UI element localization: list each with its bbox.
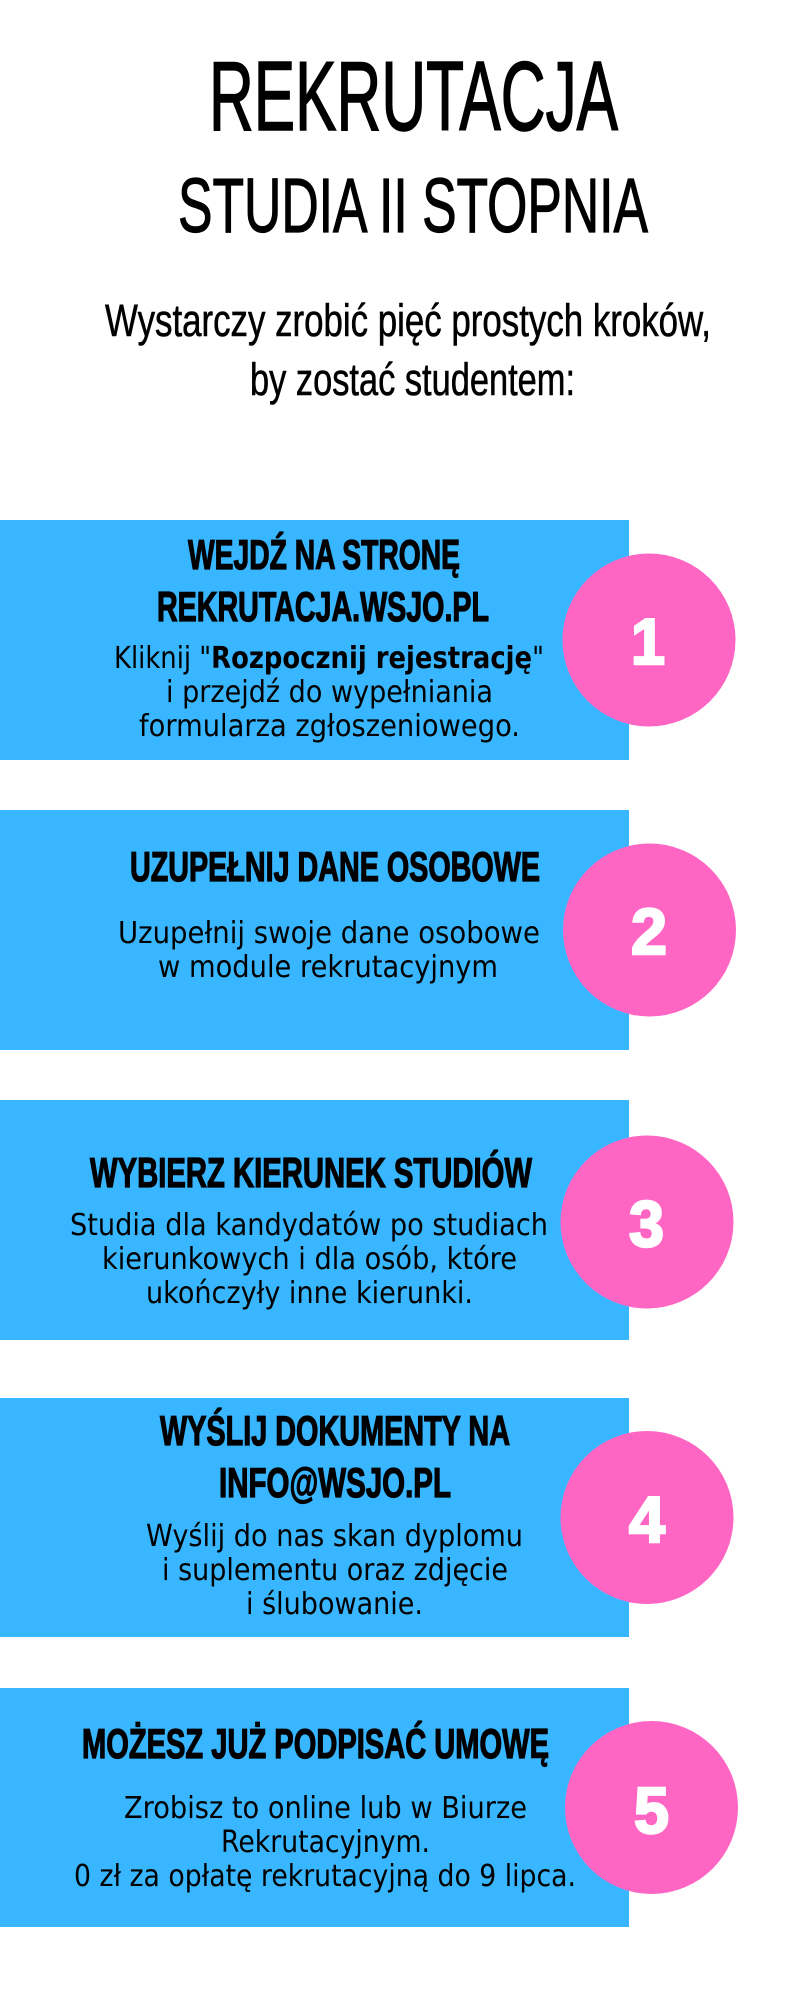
step 1 heading: REKRUTACJA.WSJO.PL xyxy=(157,583,489,630)
step 4 heading: WYŚLIJ DOKUMENTY NA xyxy=(160,1406,510,1454)
step 2 number badge: 2 xyxy=(631,895,667,968)
panel: step 2 xyxy=(0,810,736,1050)
step 1 text: Kliknij "Rozpocznij rejestrację" xyxy=(114,641,544,676)
step 5 text: Zrobisz to online lub w Biurze xyxy=(124,1791,527,1826)
step 5 number badge: 5 xyxy=(634,1774,669,1847)
step 4 text xyxy=(146,1519,523,1622)
step 5 heading: MOŻESZ JUŻ PODPISAĆ UMOWĘ xyxy=(82,1719,549,1767)
step 3 text: kierunkowych i dla osób, które xyxy=(102,1242,517,1277)
step 4 heading: INFO@WSJO.PL xyxy=(219,1459,451,1506)
step 1 heading: WEJDŹ NA STRONĘ xyxy=(188,531,460,578)
step 1 text: i przejdź do wypełniania xyxy=(166,675,493,710)
step 5 number badge xyxy=(565,1721,738,1894)
step 2 heading: UZUPEŁNIJ DANE OSOBOWE xyxy=(130,843,540,890)
step 4 text: i ślubowanie. xyxy=(246,1587,423,1622)
step 2 text xyxy=(118,916,540,985)
panel: step 3 xyxy=(0,1100,734,1340)
panel: step 5 xyxy=(0,1688,738,1927)
panel: step 4 xyxy=(0,1398,734,1637)
intro text: by zostać studentem: xyxy=(250,354,575,405)
step 4 number badge: 4 xyxy=(629,1483,665,1556)
step 2 number badge xyxy=(563,844,736,1016)
step 3 heading: WYBIERZ KIERUNEK STUDIÓW xyxy=(90,1148,532,1196)
intro text xyxy=(105,295,711,405)
step 4 number badge xyxy=(560,1431,734,1604)
step 3 text xyxy=(70,1208,548,1311)
step 3 number badge xyxy=(560,1136,734,1308)
title xyxy=(178,41,648,249)
step 5 text: 0 zł za opłatę rekrutacyjną do 9 lipca. xyxy=(74,1859,576,1894)
step 2 text: w module rekrutacyjnym xyxy=(158,950,498,985)
step 3 text: ukończyły inne kierunki. xyxy=(146,1276,473,1311)
step 4 text: Wyślij do nas skan dyplomu xyxy=(146,1519,523,1554)
panel: step 1 xyxy=(0,520,736,760)
step 5 text: Rekrutacyjnym. xyxy=(221,1825,430,1860)
step 4 heading xyxy=(160,1406,510,1506)
step 5 text xyxy=(74,1791,576,1894)
step 1 text: formularza zgłoszeniowego. xyxy=(139,709,520,744)
step 3 number badge: 3 xyxy=(629,1188,664,1260)
step 1 text xyxy=(114,641,544,744)
step 1 number badge xyxy=(562,554,736,726)
step 1 number badge: 1 xyxy=(631,605,665,678)
step 1 heading xyxy=(157,531,489,630)
step 2 text: Uzupełnij swoje dane osobowe xyxy=(118,916,540,951)
step 3 text: Studia dla kandydatów po studiach xyxy=(70,1208,548,1243)
step 4 text: i suplementu oraz zdjęcie xyxy=(162,1553,508,1588)
